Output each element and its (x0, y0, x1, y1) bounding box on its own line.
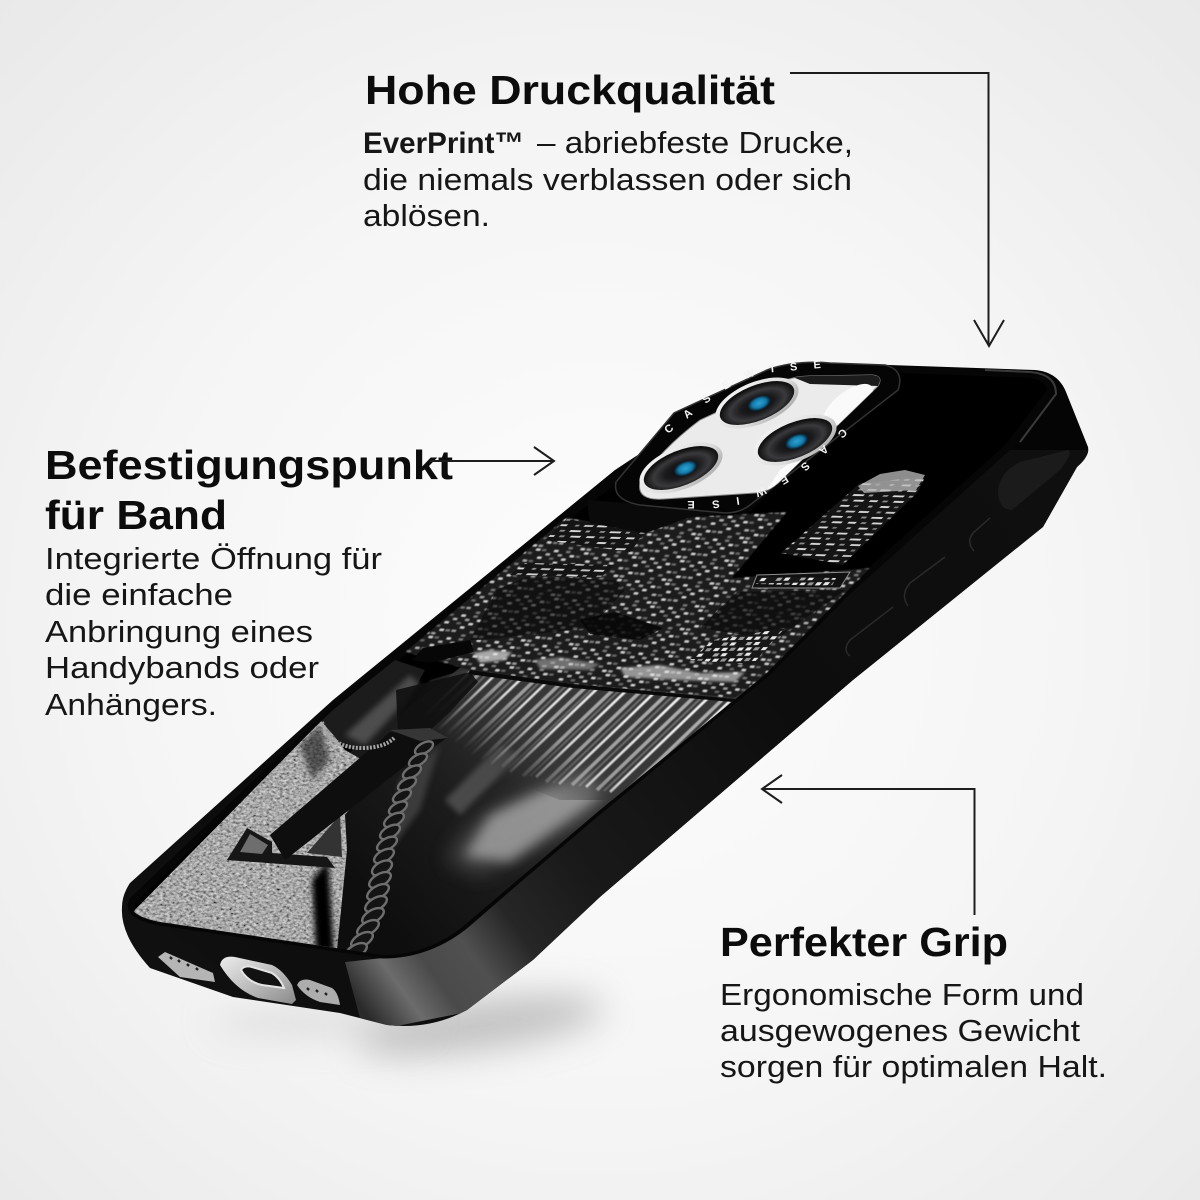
bright lower left building (510, 563, 615, 578)
rim highlight (985, 370, 1056, 442)
reflection base (428, 671, 734, 800)
body text: Integrierte Öffnung für (45, 541, 382, 576)
pier silhouette (396, 672, 478, 735)
dark roof silhouette (580, 612, 663, 640)
bollard (227, 728, 448, 868)
city blocks (405, 512, 870, 698)
brand text: CASEWISE (664, 362, 821, 432)
body text: Handybands oder (45, 650, 319, 685)
heading: Perfekter Grip (720, 919, 1008, 965)
camera plate (640, 375, 880, 499)
case body (122, 362, 1088, 1026)
bottom ports (158, 952, 340, 1005)
shoreline lights (473, 650, 745, 682)
heading: Hohe Druckqualität (365, 67, 775, 113)
heading: Befestigungspunkt (45, 442, 453, 488)
body text: Anbringung eines (45, 614, 313, 649)
bright lower right windows (690, 628, 785, 665)
dark gap above city (588, 501, 723, 532)
dark building (470, 577, 625, 640)
callout: Befestigungspunkt für Band (45, 442, 554, 722)
quay shoreline (468, 670, 735, 702)
water haze (445, 755, 612, 876)
grip notch (998, 450, 1070, 510)
usb port (220, 957, 296, 1004)
body text: – abriebfeste Drucke, (537, 125, 853, 160)
right tower (781, 477, 925, 565)
body text: Ergonomische Form und (720, 977, 1084, 1012)
body text: die niemals verblassen oder sich (363, 162, 852, 197)
arrow to case side (762, 775, 974, 915)
dark block right (700, 590, 845, 640)
bump outer (616, 362, 900, 513)
side band (345, 450, 1090, 1028)
callout: Hohe Druckqualität (363, 67, 1004, 346)
speaker left (158, 952, 215, 982)
lens top (708, 367, 806, 439)
body text: sorgen für optimalen Halt. (720, 1049, 1107, 1084)
dark pier shadow (416, 640, 474, 661)
camera bump (614, 362, 900, 514)
bezel rim (131, 368, 1050, 955)
phone case (122, 362, 1088, 1026)
chain loop (322, 722, 394, 748)
soft water bands (396, 746, 518, 843)
arrow to lanyard point (430, 447, 554, 475)
body text: Anhängers. (45, 687, 217, 722)
body text: ablösen. (363, 198, 490, 233)
plate highlights (766, 375, 880, 490)
side buttons (846, 518, 990, 656)
body text (45, 541, 382, 722)
tower crown (858, 470, 925, 493)
body text (363, 125, 853, 233)
body text: ausgewogenes Gewicht (720, 1013, 1080, 1048)
callout: Perfekter Grip (720, 775, 1107, 1084)
body text (720, 977, 1107, 1084)
stone quay (134, 720, 360, 948)
light reflections (428, 670, 734, 800)
brand text: CASEWISE (688, 430, 846, 508)
quay shading (300, 660, 425, 952)
heading (45, 442, 453, 538)
arrow to case back (790, 73, 1004, 346)
speaker right (297, 980, 340, 1005)
hanging chain (343, 739, 435, 962)
printed photo on case back (120, 470, 925, 962)
bright top building (545, 519, 645, 552)
phone shadow (210, 984, 607, 1066)
reflection lines (412, 672, 730, 794)
body text: EverPrint™ (363, 127, 524, 160)
brand text (664, 362, 846, 508)
lit roof block (752, 572, 850, 588)
lit roof windows (756, 578, 836, 586)
body text: die einfache (45, 577, 233, 612)
heading: für Band (45, 492, 227, 538)
water (330, 660, 770, 960)
lens right (746, 404, 844, 476)
lens left (632, 432, 730, 504)
